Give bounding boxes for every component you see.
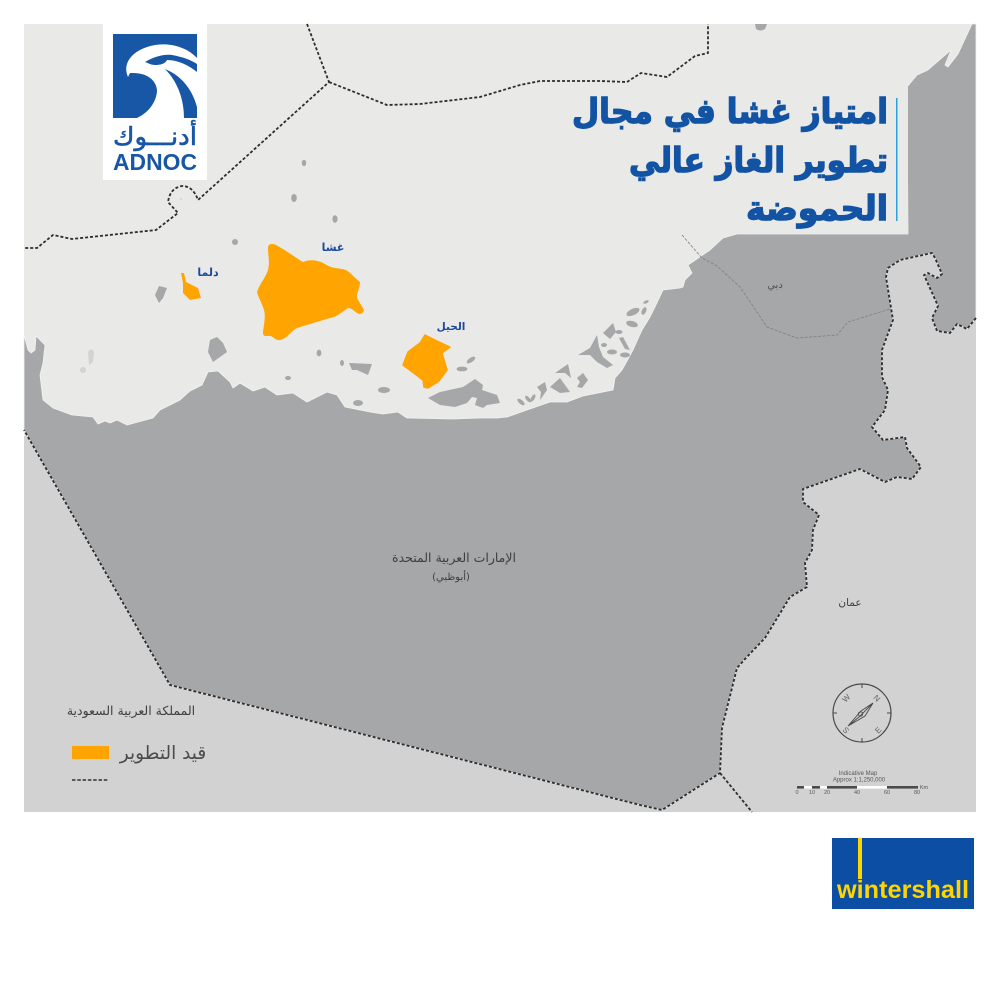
ADNOC logo	[103, 24, 207, 180]
territory: United Arab Emirates	[24, 24, 976, 810]
falcon head	[126, 44, 197, 118]
map note and scale bar: Indicative Map	[839, 771, 878, 777]
region label: UAE: الإمارات العربية المتحدة	[392, 550, 516, 566]
islets: pale	[80, 198, 182, 373]
compass: N	[871, 693, 882, 704]
sea area	[24, 24, 976, 436]
legend: boundary line	[72, 779, 109, 781]
region label: Dubai: دبي	[767, 280, 783, 291]
title line 1: امتياز غشا في مجال	[572, 92, 888, 132]
islands: west and central	[155, 160, 500, 408]
map note and scale bar	[795, 771, 929, 796]
map note and scale bar: 40	[854, 790, 860, 796]
title accent line	[896, 98, 898, 221]
compass: W	[840, 692, 853, 704]
legend: under development	[72, 743, 206, 764]
falcon wing stroke and eye	[145, 55, 197, 72]
emirate boundary	[682, 235, 890, 338]
map note and scale bar: 0	[795, 790, 799, 796]
islands: eastern shoals	[516, 299, 649, 406]
Arabic wordmark: أدنـــوك	[113, 119, 197, 151]
map note and scale bar: 60	[884, 790, 890, 796]
legend: under development: قيد التطوير	[119, 743, 206, 764]
concession: Ghasha	[257, 244, 364, 340]
map note and scale bar: 80	[914, 790, 920, 796]
international boundaries	[24, 24, 976, 812]
region label: Oman: عمان	[838, 597, 862, 609]
map note and scale bar: Km	[920, 785, 929, 791]
panel: map	[24, 24, 976, 812]
field label: Dalma: دلما	[197, 266, 219, 279]
map note and scale bar: Approx 1:1,250,000	[833, 778, 886, 784]
region label: Abu Dhabi: (أبوظبي)	[432, 570, 470, 583]
concession: Hail	[403, 335, 450, 388]
concession: Dalma	[181, 273, 201, 300]
map note and scale bar: 10	[809, 790, 815, 796]
Wintershall logo	[832, 838, 974, 909]
Latin wordmark: ADNOC	[113, 149, 197, 175]
field label: Ghasha: غشا	[322, 241, 344, 254]
compass	[833, 684, 891, 742]
title line 2: تطوير الغاز عالي	[629, 141, 888, 181]
region label: Saudi Arabia: المملكة العربية السعودية	[67, 703, 195, 719]
falcon neck sliver	[165, 69, 197, 118]
field label: Hail: الحيل	[437, 321, 465, 333]
Wintershall logo: wintershall	[836, 876, 969, 904]
title line 3: الحموضة	[746, 189, 888, 229]
title panel	[540, 87, 908, 234]
compass: S	[841, 725, 851, 735]
top-right headland	[755, 24, 767, 30]
compass: E	[873, 725, 883, 735]
map note and scale bar: 20	[824, 790, 830, 796]
